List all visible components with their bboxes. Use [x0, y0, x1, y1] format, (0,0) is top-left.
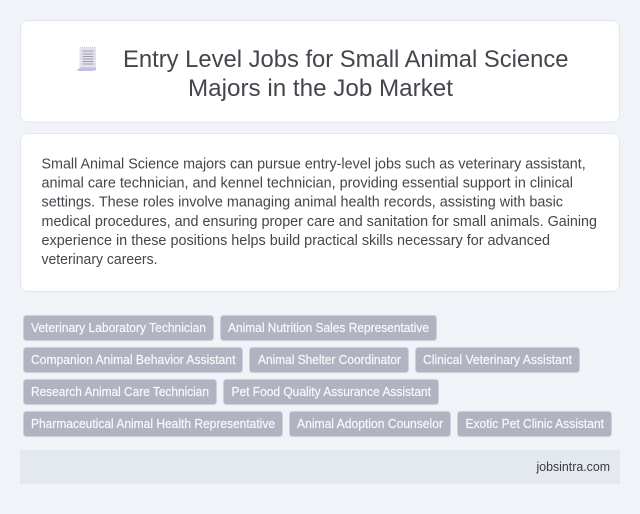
title: Majors in the Job Market [188, 75, 453, 102]
footer [20, 450, 620, 484]
icon: document scroll [77, 48, 96, 71]
text block: description [42, 156, 597, 268]
text block: description: experience in these positions helps build practical skills necessary for advanced [42, 233, 550, 249]
panel: description [20, 134, 620, 292]
tag: Animal Nutrition Sales Representative [220, 316, 436, 340]
tag list [24, 316, 612, 436]
text block: description: medical procedures, and ensuring proper care and sanitation for small animals. Gaining [42, 214, 597, 230]
tag: Animal Shelter Coordinator [250, 348, 408, 372]
tag: Veterinary Laboratory Technician [24, 316, 214, 340]
tag: Research Animal Care Technician [24, 380, 216, 404]
text block: description: veterinary careers. [42, 252, 158, 268]
tag: Clinical Veterinary Assistant [416, 348, 580, 372]
tag: Veterinary Laboratory Technician: Veterinary Laboratory Technician [31, 321, 206, 335]
title [123, 46, 568, 102]
title: Entry Level Jobs for Small Animal Science [123, 46, 568, 73]
tag: Pet Food Quality Assurance Assistant: Pet Food Quality Assurance Assistant [232, 385, 431, 399]
tag: Exotic Pet Clinic Assistant [458, 412, 612, 436]
text block: description: Small Animal Science majors can pursue entry-level jobs such as veterinary assistant, [42, 156, 586, 172]
tag: Research Animal Care Technician: Research Animal Care Technician [31, 385, 209, 399]
tag: Companion Animal Behavior Assistant [24, 348, 242, 372]
tag: Animal Adoption Counselor [290, 412, 450, 436]
tag: Clinical Veterinary Assistant: Clinical Veterinary Assistant [423, 353, 573, 367]
tag: Animal Shelter Coordinator: Animal Shelter Coordinator [258, 353, 401, 367]
tag: Animal Adoption Counselor: Animal Adoption Counselor [297, 417, 443, 431]
footer source text: jobsintra.com [536, 460, 610, 474]
tag: Pharmaceutical Animal Health Representative: Pharmaceutical Animal Health Representative [31, 417, 275, 431]
tag: Exotic Pet Clinic Assistant: Exotic Pet Clinic Assistant [466, 417, 605, 431]
tag: Animal Nutrition Sales Representative: Animal Nutrition Sales Representative [228, 321, 429, 335]
tag: Pharmaceutical Animal Health Representative [24, 412, 282, 436]
tag: Companion Animal Behavior Assistant: Companion Animal Behavior Assistant [31, 353, 236, 367]
panel: header [20, 20, 620, 122]
text block: description: animal care technician, and kennel technician, providing essential support in clinical [42, 175, 573, 191]
text block: description: settings. These roles involve managing animal health records, assisting with basic [42, 195, 563, 211]
tag: Pet Food Quality Assurance Assistant [224, 380, 438, 404]
